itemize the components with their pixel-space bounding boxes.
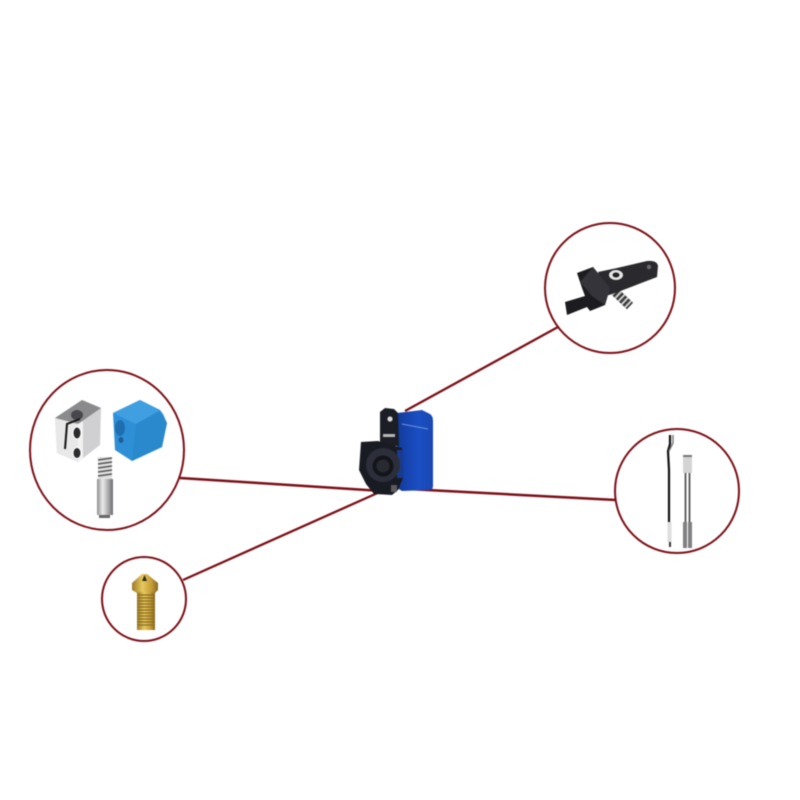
icon: blue silicone housing xyxy=(397,410,433,491)
icon: brass nozzle xyxy=(132,574,158,630)
icon: heater cartridge xyxy=(683,455,692,548)
panel: thermistor and heater cartridge callout xyxy=(615,429,739,553)
icon: fan shroud and fan xyxy=(359,441,403,495)
icon: thermistor with wire xyxy=(668,435,673,547)
connector line: to thermistor callout xyxy=(408,489,616,500)
central hotend assembly xyxy=(359,408,433,495)
connector line: to nozzle callout xyxy=(183,491,382,580)
icon: switch body xyxy=(565,267,610,315)
panel: heater block, silicone sock and heatbreak callout xyxy=(30,370,184,530)
icon: lever arm xyxy=(598,261,658,296)
icon: aluminium heater block xyxy=(55,400,101,462)
panel: brass nozzle callout xyxy=(102,557,186,641)
icon: blue silicone sock xyxy=(113,400,167,461)
icon: hex emblem xyxy=(609,270,623,280)
icon: top bracket xyxy=(380,408,399,446)
icon: coil spring xyxy=(611,288,630,306)
connector line: to heater block callout xyxy=(180,478,382,491)
connector line: to switch arm callout xyxy=(405,327,558,411)
panel: switch arm callout xyxy=(545,223,675,353)
icon: threaded heatbreak xyxy=(97,457,113,518)
